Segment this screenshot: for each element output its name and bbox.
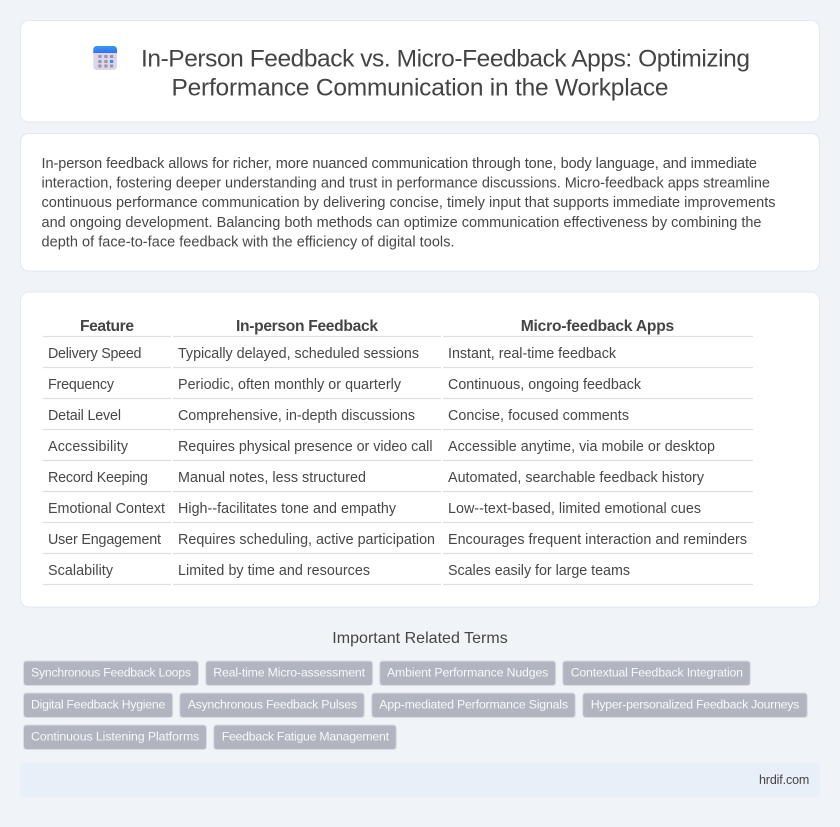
summary paragraph: interaction, fostering deeper understanding and trust in performance discussions. Micro-feedback apps streamline [42,176,770,192]
row: frequency: Periodic, often monthly or quarterly [178,377,402,393]
table header row: Micro-feedback Apps [521,318,675,335]
row: detail level: Detail Level [48,408,121,424]
summary paragraph: In-person feedback allows for richer, more nuanced communication through tone, body language, and immediate [42,156,757,172]
summary paragraph: depth of face-to-face feedback with the efficiency of digital tools. [42,234,454,250]
row: emotional context: Low--text-based, limited emotional cues [448,501,701,517]
row: accessibility: Requires physical presence or video call [178,439,432,455]
row: frequency: Frequency [48,377,115,393]
row: scalability: Limited by time and resources [178,563,370,579]
summary paragraph [42,156,776,250]
row: scalability: Scalability [48,563,114,579]
row: scalability: Scales easily for large teams [448,563,630,579]
table header row [80,318,675,335]
row: user engagement: Encourages frequent interaction and reminders [448,532,747,548]
row: record keeping: Record Keeping [48,470,148,486]
related term tags [24,661,807,750]
tag: feedback fatigue management: Feedback Fatigue Management [222,730,390,744]
row: user engagement: Requires scheduling, active participation [178,532,435,548]
title [141,46,750,102]
row: delivery speed [48,346,617,362]
title: Performance Communication in the Workplace [172,75,668,102]
tag: app-mediated performance signals [372,693,575,718]
tag: real-time micro-assessment [206,661,373,686]
tag: contextual feedback integration: Contextual Feedback Integration [571,666,743,680]
row: detail level [48,408,629,424]
tag: real-time micro-assessment: Real-time Micro-assessment [213,666,366,680]
row: emotional context [48,501,701,517]
row: detail level: Comprehensive, in-depth discussions [178,408,415,424]
tag: digital feedback hygiene: Digital Feedback Hygiene [31,698,165,712]
tag: hyper-personalized feedback journeys [583,693,807,718]
row: delivery speed: Typically delayed, scheduled sessions [178,346,419,362]
row: record keeping [48,470,705,486]
tag: ambient performance nudges: Ambient Performance Nudges [387,666,548,680]
tag: digital feedback hygiene [24,693,173,718]
tag: synchronous feedback loops: Synchronous Feedback Loops [31,666,191,680]
row: emotional context: Emotional Context [48,501,165,517]
row: record keeping: Automated, searchable feedback history [448,470,705,486]
tag: asynchronous feedback pulses: Asynchronous Feedback Pulses [188,698,357,712]
row: scalability [48,563,630,579]
summary paragraph: continuous performance communication by delivering concise, timely input that supports immediate improvements [42,195,776,211]
tag: continuous listening platforms [24,725,206,750]
row: delivery speed: Instant, real-time feedback [448,346,617,362]
tag: app-mediated performance signals: App-mediated Performance Signals [379,698,568,712]
row: accessibility: Accessibility [48,439,129,455]
row: delivery speed: Delivery Speed [48,346,142,362]
footer [20,763,820,797]
heading: important related terms: Important Related Terms [332,630,508,647]
table header row: Feature [80,318,134,335]
tag: synchronous feedback loops [24,661,198,686]
tag: ambient performance nudges [380,661,556,686]
row: frequency [48,377,642,393]
row: accessibility [48,439,715,455]
row: emotional context: High--facilitates tone and empathy [178,501,397,517]
title: In-Person Feedback vs. Micro-Feedback Apps: Optimizing [141,46,750,73]
row: accessibility: Accessible anytime, via mobile or desktop [448,439,715,455]
icon: calendar [93,46,117,70]
footer: hrdif.com [759,773,809,787]
row: detail level: Concise, focused comments [448,408,629,424]
row: user engagement: User Engagement [48,532,161,548]
row: frequency: Continuous, ongoing feedback [448,377,642,393]
tag: feedback fatigue management [214,725,396,750]
panel: summary text [20,134,820,271]
tag: hyper-personalized feedback journeys: Hyper-personalized Feedback Journeys [591,698,799,712]
header panel [20,20,820,122]
row: user engagement [48,532,747,548]
summary paragraph: and ongoing development. Balancing both methods can optimize communication effectiveness by combining the [42,215,762,231]
tag: contextual feedback integration [563,661,750,686]
tag: asynchronous feedback pulses [180,693,364,718]
tag: continuous listening platforms: Continuous Listening Platforms [31,730,199,744]
row: record keeping: Manual notes, less structured [178,470,366,486]
table header row: In-person Feedback [236,318,378,335]
panel: comparison table [20,292,820,607]
